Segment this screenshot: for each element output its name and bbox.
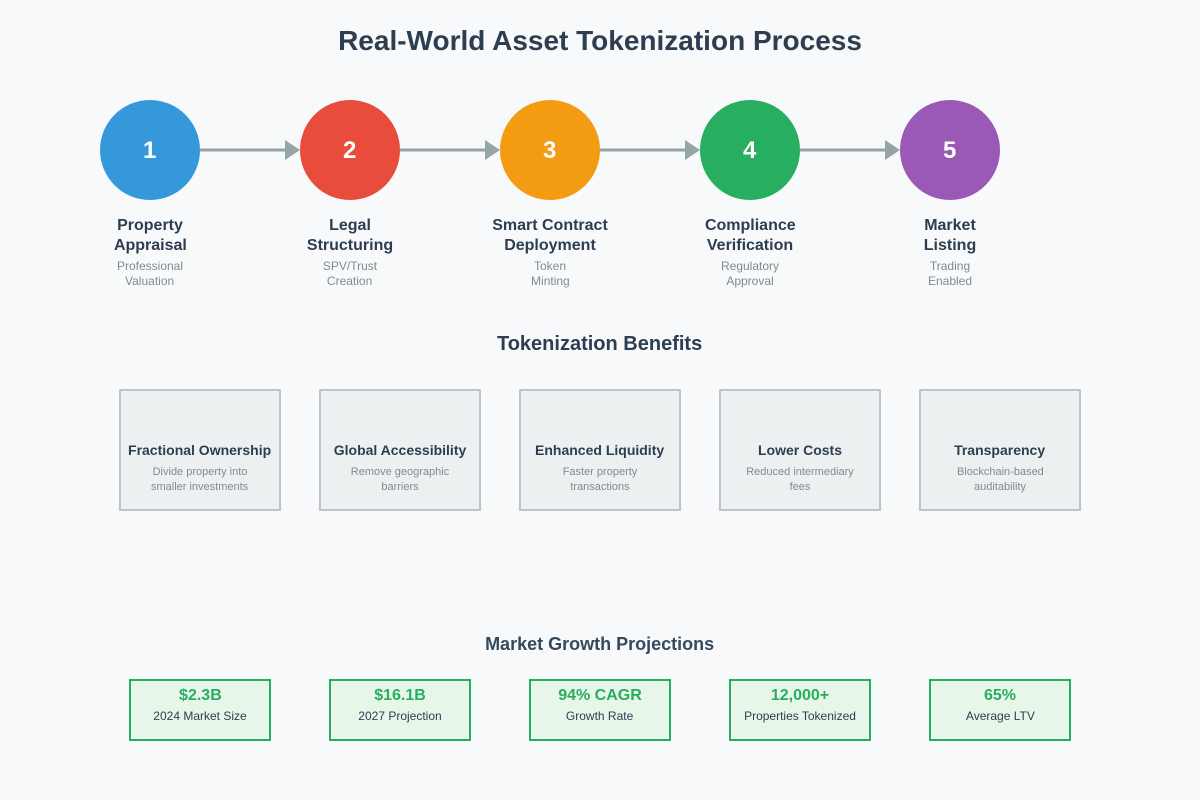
arrow: step 3 to 4 (600, 140, 700, 160)
benefit card: lower costs (720, 390, 880, 510)
heading: market growth projections: Market Growth Projections (485, 634, 714, 654)
metric: properties tokenized (730, 680, 870, 740)
step label 2: Creation (327, 274, 372, 288)
step label 3: Deployment (504, 237, 596, 254)
benefit card: transparency: Transparency (954, 442, 1045, 458)
step label 5 (924, 217, 976, 288)
metric: growth rate (530, 680, 670, 740)
step label 5: Market (924, 217, 976, 234)
step label 3: Smart Contract (492, 217, 608, 234)
benefit card: global accessibility (320, 390, 480, 510)
benefit card: enhanced liquidity: transactions (570, 481, 630, 493)
benefit card: enhanced liquidity: Faster property (563, 466, 638, 478)
metric: growth rate: 94% CAGR (558, 687, 642, 704)
step label 1 (114, 217, 187, 288)
benefit card: transparency (920, 390, 1080, 510)
step label 2: Structuring (307, 237, 393, 254)
step label 1: Appraisal (114, 237, 187, 254)
metric: properties tokenized: 12,000+ (771, 687, 829, 704)
step label 1: Professional (117, 259, 183, 273)
metric: growth rate: Growth Rate (566, 709, 634, 723)
metric: projection (330, 680, 470, 740)
step label 4: Verification (707, 237, 793, 254)
step circle 4 (700, 100, 800, 200)
step circle 5: 5 (943, 137, 956, 164)
arrow: step 1 to 2 (200, 140, 300, 160)
metric: market size: 2024 Market Size (153, 709, 247, 723)
step label 2: Legal (329, 217, 371, 234)
metric: market size: $2.3B (179, 687, 222, 704)
benefit card: lower costs: fees (790, 481, 811, 493)
metric: properties tokenized: Properties Tokenized (744, 709, 856, 723)
step label 3: Token (534, 259, 566, 273)
step label 3: Minting (531, 274, 570, 288)
metric: average LTV (930, 680, 1070, 740)
step circle 1 (100, 100, 200, 200)
step label 4: Compliance (705, 217, 796, 234)
step label 1: Valuation (125, 274, 174, 288)
step circle 3 (500, 100, 600, 200)
metric: projection: $16.1B (374, 687, 426, 704)
benefit card: lower costs: Reduced intermediary (746, 466, 854, 478)
title: Real-World Asset Tokenization Process (338, 25, 862, 56)
benefit card: fractional ownership: Divide property into (153, 466, 247, 478)
step circle 2: 2 (343, 137, 356, 164)
step label 4 (705, 217, 796, 288)
benefit card: global accessibility: Global Accessibility (334, 442, 466, 458)
benefit card: fractional ownership: Fractional Ownership (128, 442, 271, 458)
heading: tokenization benefits: Tokenization Benefits (497, 333, 702, 355)
benefit card: global accessibility: Remove geographic (351, 466, 450, 478)
metric: market size (130, 680, 270, 740)
step circle 1: 1 (143, 137, 156, 164)
step circle 5 (900, 100, 1000, 200)
step label 4: Regulatory (721, 259, 779, 273)
metric: average LTV: 65% (984, 687, 1016, 704)
benefit card: enhanced liquidity: Enhanced Liquidity (535, 442, 664, 458)
metric: projection: 2027 Projection (358, 709, 442, 723)
step label 4: Approval (726, 274, 774, 288)
benefit card: transparency: Blockchain-based (957, 466, 1044, 478)
benefit card: fractional ownership (120, 390, 280, 510)
step label 5: Enabled (928, 274, 972, 288)
benefit card: lower costs: Lower Costs (758, 442, 842, 458)
step circle 4: 4 (743, 137, 757, 164)
benefit card: enhanced liquidity (520, 390, 680, 510)
benefit card: fractional ownership: smaller investments (151, 481, 249, 493)
arrow: step 4 to 5 (800, 140, 900, 160)
step label 3 (492, 217, 608, 288)
step label 2 (307, 217, 393, 288)
benefit card: transparency: auditability (974, 481, 1026, 493)
metric: average LTV: Average LTV (966, 709, 1035, 723)
step circle 3: 3 (543, 137, 556, 164)
arrow: step 2 to 3 (400, 140, 500, 160)
benefit card: global accessibility: barriers (381, 481, 419, 493)
step label 1: Property (117, 217, 183, 234)
step label 5: Trading (930, 259, 970, 273)
step label 2: SPV/Trust (323, 259, 378, 273)
step circle 2 (300, 100, 400, 200)
step label 5: Listing (924, 237, 976, 254)
